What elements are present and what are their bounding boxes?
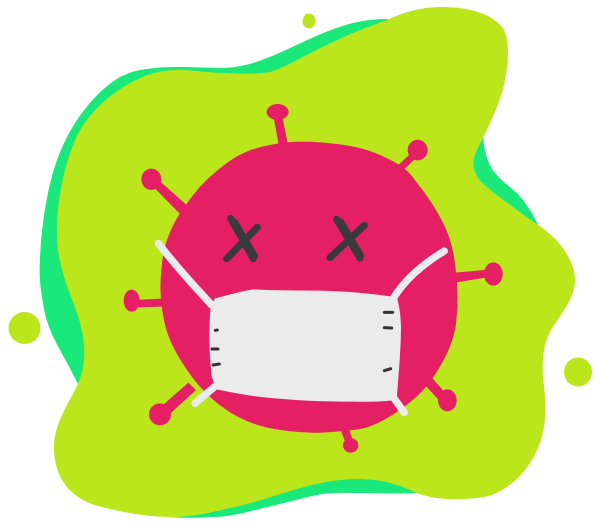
decorative dot: top	[302, 14, 316, 28]
mask straps	[158, 243, 444, 413]
virus body	[160, 142, 458, 433]
eye: left X	[227, 218, 257, 259]
eye: right X	[330, 219, 364, 258]
background blob: green shadow	[40, 19, 538, 518]
decorative dot: right	[564, 358, 592, 386]
decorative dot: left	[8, 312, 40, 344]
virus character	[124, 104, 503, 453]
virus spikes	[124, 104, 503, 453]
surgical mask	[209, 289, 401, 402]
mask stitches	[212, 312, 393, 371]
